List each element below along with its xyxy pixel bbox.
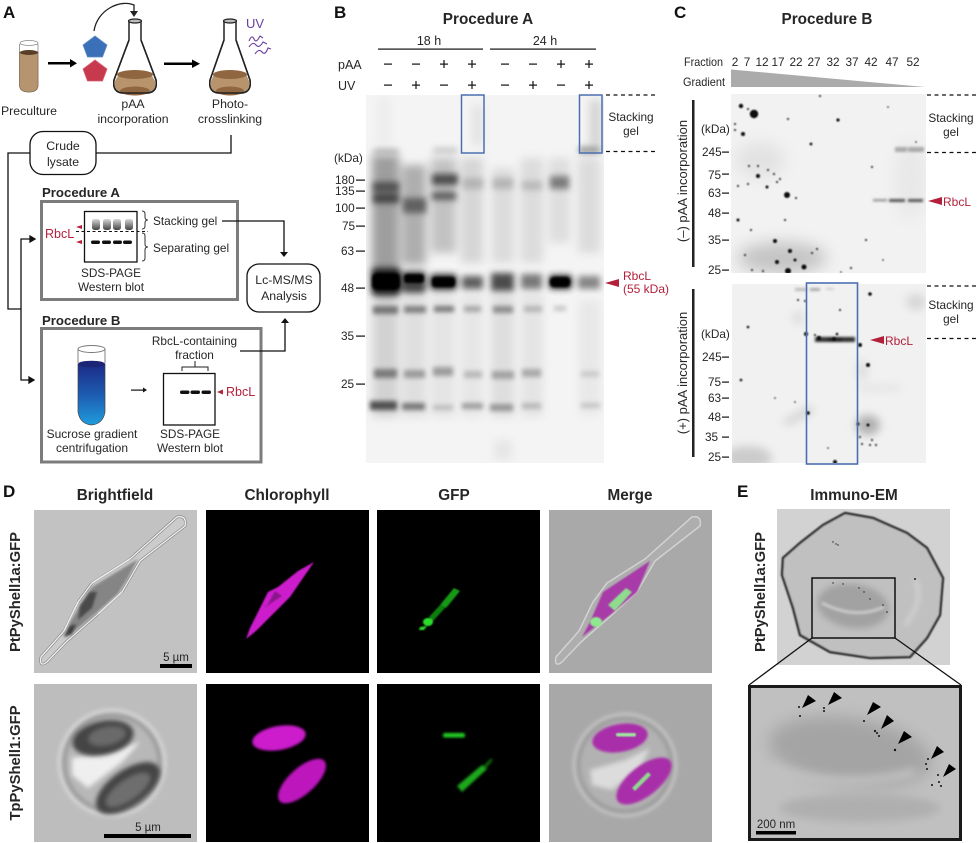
molecular weight ladder: 35 <box>341 329 355 343</box>
row label PtPyShell1a:GFP: PtPyShell1a:GFP <box>8 532 24 652</box>
label: SDS-PAGE Western blot: SDS-PAGE <box>81 266 141 280</box>
box: Lc-MS/MS Analysis: Analysis <box>261 289 307 303</box>
icon: red pentagon <box>83 60 107 81</box>
image: merge PtPyShell1a <box>549 510 712 673</box>
RbcL marker <box>45 225 82 244</box>
fraction numbers: 47 <box>885 55 899 69</box>
heading: Procedure B blot: Procedure B <box>782 11 872 28</box>
speckles <box>740 292 877 464</box>
RbcL callout lower: RbcL <box>885 334 913 348</box>
fraction numbers: 42 <box>864 55 878 69</box>
RbcL callout <box>605 269 669 296</box>
label: Sucrose gradient centrifugation: Sucrose gradient <box>47 427 137 441</box>
molecular weight ladder: 180 <box>335 173 355 187</box>
inset rectangle <box>812 578 895 638</box>
stacking gel dashes and label: Stacking <box>608 110 654 124</box>
stacking gel marks lower: gel <box>943 312 959 326</box>
image: merge TpPyShell1 <box>549 684 712 842</box>
stacking gel marks upper: gel <box>943 125 959 139</box>
label: Photo-crosslinking: crosslinking <box>198 112 262 126</box>
ladder lower blot: 48 <box>708 410 722 424</box>
stacking gel marks lower <box>927 286 976 338</box>
image: chlorophyll PtPyShell1a <box>206 510 369 673</box>
fraction numbers: 52 <box>906 55 920 69</box>
smears <box>372 98 601 460</box>
label: RbcL-containing fraction: RbcL-containing <box>152 334 237 348</box>
panel letter B: B <box>334 3 346 22</box>
lower bands <box>370 306 600 411</box>
molecular weight ladder: 48 <box>341 281 355 295</box>
row label: PtPyShell1a:GFP <box>753 532 769 652</box>
scale bar row 1: 5 µm <box>163 652 189 664</box>
column titles: Brightfield <box>77 487 153 504</box>
box: Crude lysate <box>30 132 96 174</box>
blot: plus pAA <box>724 284 926 470</box>
panel letter A: A <box>3 3 15 22</box>
blot: minus pAA <box>731 94 926 274</box>
image: brightfield PtPyShell1a <box>34 510 197 673</box>
arrow: stacking gel to LC-MS <box>222 221 288 257</box>
ladder upper blot: 25 <box>708 263 722 277</box>
fraction numbers <box>684 55 920 69</box>
treatment rows pAA and UV <box>338 58 593 93</box>
fraction numbers: 27 <box>807 55 821 69</box>
molecular weight ladder: 100 <box>335 201 355 215</box>
fraction numbers: Fraction <box>684 55 723 69</box>
panel letter C: C <box>674 3 686 22</box>
label: Separating gel: Separating gel <box>153 241 229 255</box>
EM overview image <box>777 509 950 665</box>
label: RbcL-containing fraction: fraction <box>175 348 214 362</box>
speckles <box>734 95 917 274</box>
EM inset image <box>749 686 961 840</box>
panel A: workflow schematic <box>1 3 320 462</box>
label: SDS-PAGE Western blot B: SDS-PAGE <box>160 427 220 441</box>
ladder lower blot: 35 <box>705 430 719 444</box>
label: Sucrose gradient centrifugation: centrifugation <box>56 441 128 455</box>
image: GFP PtPyShell1a <box>377 510 540 673</box>
ladder lower blot: 75 <box>708 375 722 389</box>
ladder lower blot: (kDa) <box>701 327 730 341</box>
label: SDS-PAGE Western blot: Western blot <box>78 280 145 294</box>
RbcL callout: RbcL <box>623 269 651 283</box>
gel brackets <box>142 211 148 261</box>
icon: UV squiggles <box>249 36 271 54</box>
blue fraction box <box>806 283 858 464</box>
connector: lysate to procedures <box>8 153 35 383</box>
label: pAA incorporation: incorporation <box>97 112 169 126</box>
RbcL callout lower <box>870 334 913 348</box>
image: GFP TpPyShell1 <box>377 684 540 842</box>
molecular weight ladder: 25 <box>341 377 355 391</box>
arrow: incorporation to crosslinking <box>164 60 200 68</box>
column titles: GFP <box>438 487 470 504</box>
RbcL main band halos <box>371 267 600 296</box>
RbcL marker B: RbcL <box>226 385 255 399</box>
zoom lines <box>749 638 961 685</box>
stacking gel marks upper <box>927 95 976 152</box>
row label TpPyShell1:GFP: TpPyShell1:GFP <box>8 705 24 821</box>
ladder upper blot <box>701 122 730 277</box>
stacking gel marks lower: Stacking <box>928 298 974 312</box>
molecular weight ladder <box>334 151 365 391</box>
icon: sucrose gradient tube <box>78 346 105 425</box>
arrowheads <box>802 692 956 777</box>
heading: Procedure A: Procedure A <box>42 185 120 200</box>
panel B: western blot Procedure A <box>334 3 669 463</box>
icon: blue pentagon <box>83 36 107 57</box>
box: Crude lysate: Crude <box>46 139 80 153</box>
box: Lc-MS/MS Analysis: Lc-MS/MS <box>255 273 313 287</box>
scale bar row 2 <box>104 822 191 838</box>
icon: crosslinking flask <box>210 19 250 96</box>
connector: crosslinking to lysate <box>96 135 231 153</box>
stacking gel dashes and label: gel <box>623 124 639 138</box>
RbcL callout upper <box>928 195 971 209</box>
scale bar row 2: 5 µm <box>135 822 161 834</box>
box: Crude lysate: lysate <box>47 155 79 169</box>
heading: Immuno-EM: Immuno-EM <box>810 487 898 504</box>
stacking gel marks upper: Stacking <box>928 111 974 125</box>
column titles: Merge <box>607 487 653 504</box>
fraction bracket <box>182 361 208 371</box>
molecular weight ladder: 135 <box>335 184 355 198</box>
ladder upper blot: 63 <box>708 186 722 200</box>
molecular weight ladder: 63 <box>341 244 355 258</box>
stacking gel boxes <box>462 95 602 153</box>
scale bar: 200 nm <box>757 819 795 831</box>
gradient wedge: Gradient <box>683 75 726 89</box>
vertical label: minus pAA: (–) pAA incorporation <box>675 120 690 242</box>
RbcL callout: (55 kDa) <box>623 282 669 296</box>
label: SDS-PAGE Western blot B: Western blot <box>157 441 224 455</box>
arrow: curved pAA addition <box>94 3 138 31</box>
label: Photo-crosslinking: Photo- <box>212 97 248 111</box>
label: Stacking gel: Stacking gel <box>153 214 217 228</box>
panel C: sucrose fraction blots <box>674 3 976 470</box>
heading: Procedure B: Procedure B <box>42 313 120 328</box>
molecular weight ladder: 75 <box>342 219 356 233</box>
scale bar row 1 <box>160 652 192 668</box>
RbcL callout upper: RbcL <box>943 195 971 209</box>
treatment rows pAA and UV: pAA <box>338 58 362 72</box>
icon: preculture tube <box>20 40 38 92</box>
panel D: fluorescence microscopy grid <box>3 482 712 842</box>
ladder lower blot: 63 <box>708 391 722 405</box>
heading: Procedure A blot: Procedure A <box>443 11 533 28</box>
fraction numbers: 2 <box>732 55 738 69</box>
stacking gel dashes and label <box>606 95 655 152</box>
fraction numbers: 17 <box>771 55 785 69</box>
ladder upper blot: 245 <box>702 145 722 159</box>
gradient wedge <box>683 70 925 89</box>
fraction numbers: 37 <box>845 55 859 69</box>
image: brightfield TpPyShell1 <box>34 684 197 842</box>
treatment rows pAA and UV: UV <box>338 79 356 93</box>
molecular weight ladder: (kDa) <box>334 151 363 165</box>
label: Preculture: Preculture <box>1 104 57 118</box>
gel schematic <box>76 212 148 262</box>
blot image <box>366 95 604 463</box>
ladder lower blot <box>701 327 730 464</box>
RbcL marker: RbcL <box>45 227 74 241</box>
fraction numbers: 32 <box>826 55 840 69</box>
time labels <box>378 34 596 50</box>
gold particles <box>798 706 942 787</box>
gel schematic B <box>164 374 215 425</box>
image: chlorophyll TpPyShell1 <box>206 684 369 842</box>
arrow: preculture to pAA <box>48 59 77 68</box>
fraction numbers: 12 <box>755 55 769 69</box>
arrow: fraction to LC-MS <box>240 318 289 351</box>
upper bands <box>373 147 600 213</box>
time labels: 24 h <box>533 34 557 48</box>
column titles <box>77 487 653 504</box>
panel letter E: E <box>737 482 748 501</box>
UV label: UV <box>246 16 264 31</box>
ladder lower blot: 245 <box>702 350 722 364</box>
panel letter D: D <box>3 482 15 501</box>
icon: culture flask <box>114 19 156 96</box>
panel: Procedure A box <box>42 202 238 300</box>
time labels: 18 h <box>417 34 441 48</box>
label: pAA incorporation: pAA <box>121 97 145 111</box>
panel E: immuno-EM <box>737 482 961 840</box>
arrow: tube to gel <box>131 388 147 392</box>
ladder lower blot: 25 <box>708 450 722 464</box>
RbcL main band cores <box>372 273 570 290</box>
column titles: Chlorophyll <box>245 487 329 504</box>
ladder upper blot: (kDa) <box>701 122 730 136</box>
panel: Procedure B box <box>42 328 261 462</box>
ladder upper blot: 75 <box>708 168 722 182</box>
box: Lc-MS/MS Analysis <box>247 264 320 312</box>
ladder upper blot: 35 <box>708 233 722 247</box>
gold particles <box>832 541 916 613</box>
fraction numbers: 7 <box>744 55 750 69</box>
fraction numbers: 22 <box>789 55 803 69</box>
ladder upper blot: 48 <box>708 206 722 220</box>
vertical label: plus pAA: (+) pAA incorporation <box>675 312 690 434</box>
